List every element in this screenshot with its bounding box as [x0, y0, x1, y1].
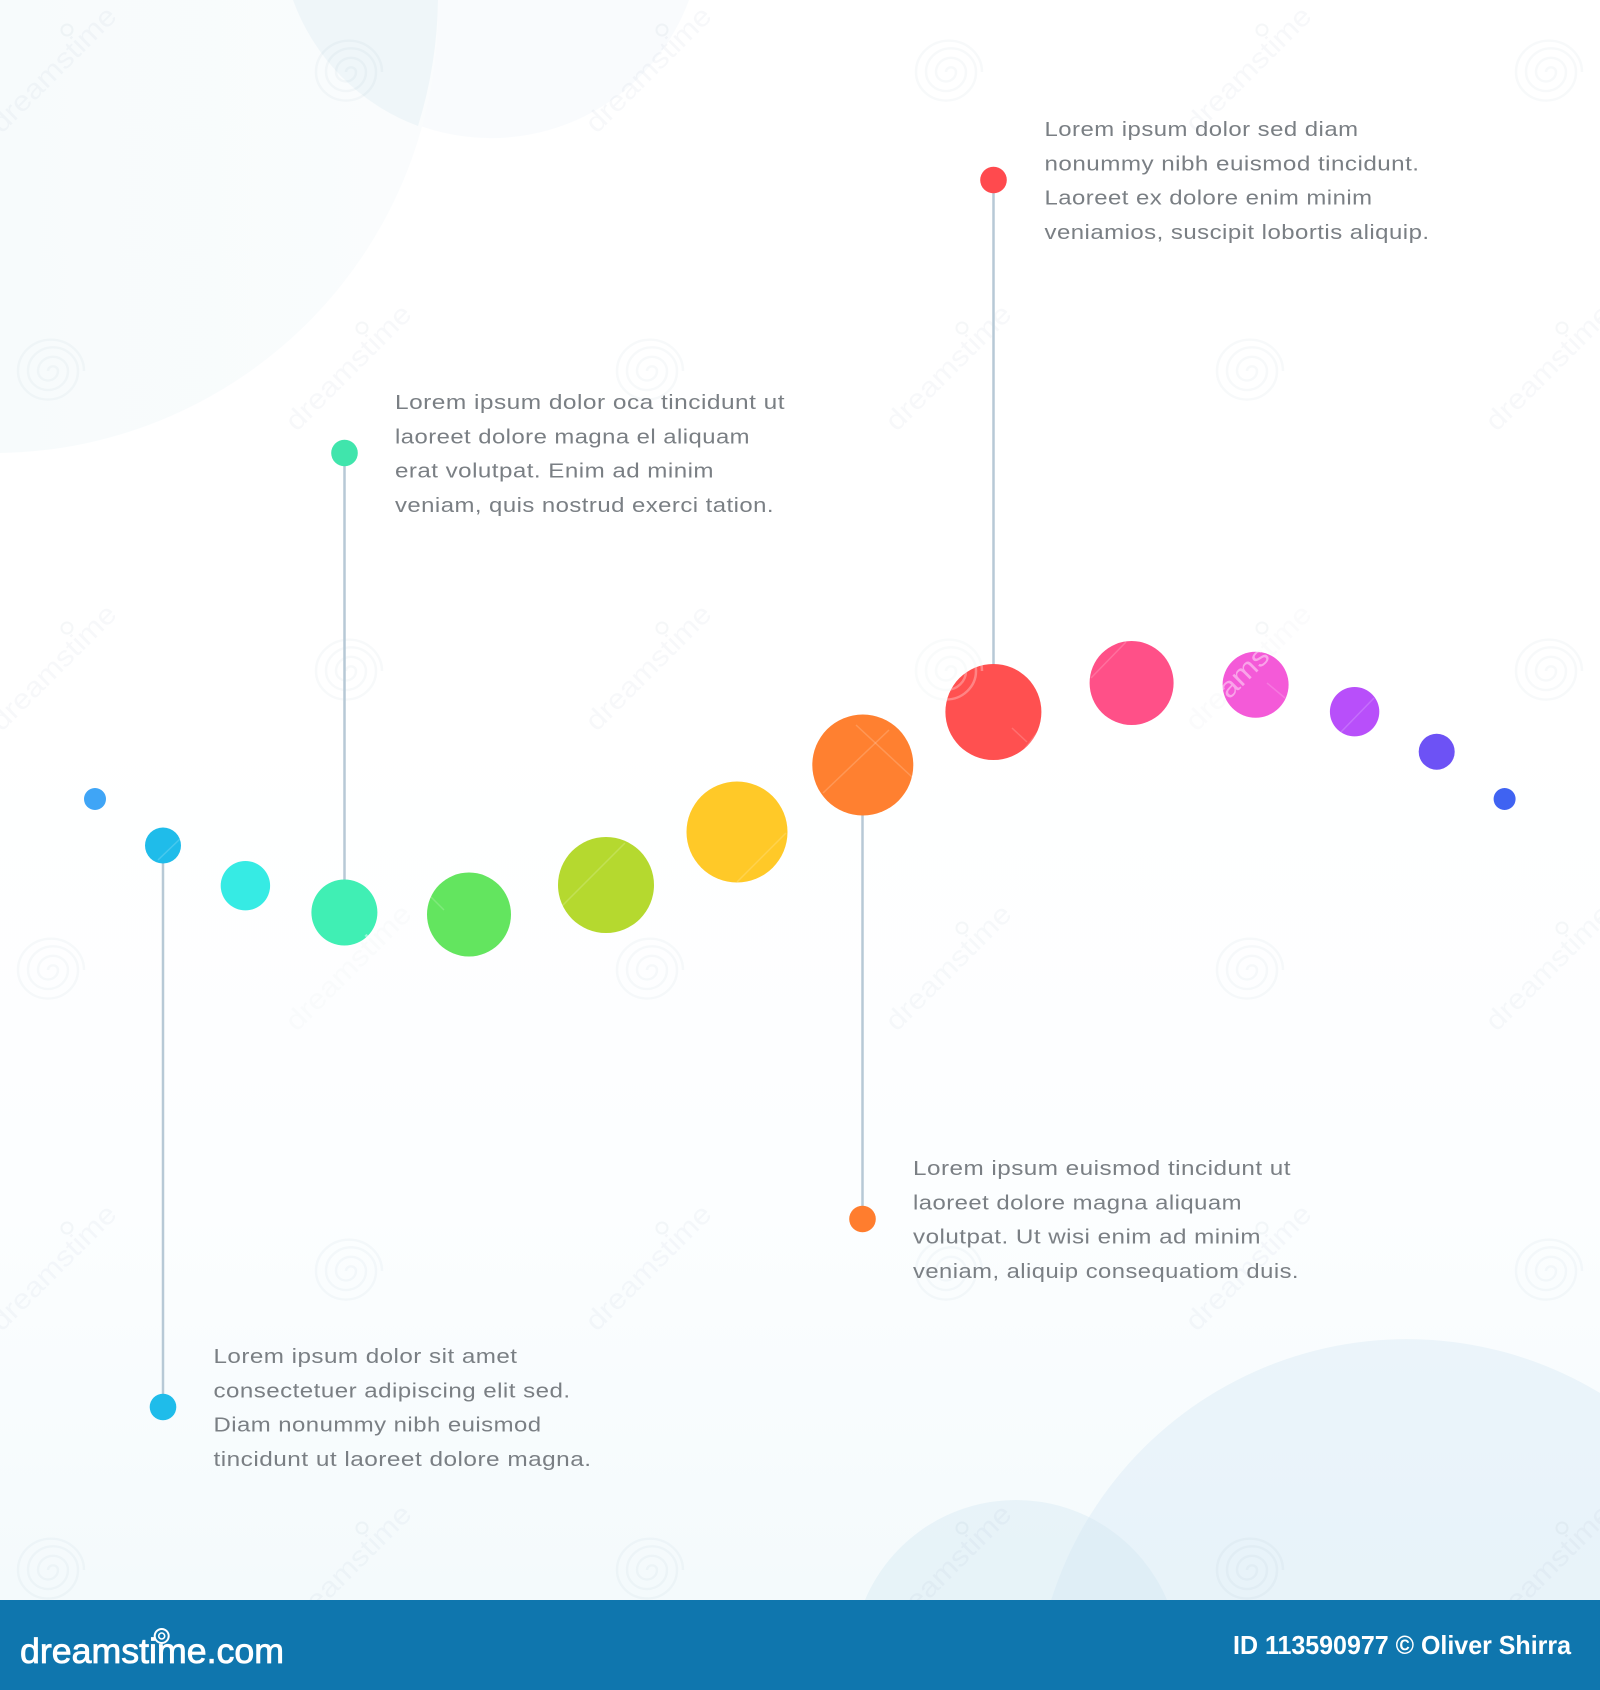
- text block: bottom left: consectetuer adipiscing elit sed.: [214, 1379, 570, 1402]
- watermark overlay on dots: dreamstime: [1179, 598, 1318, 737]
- background circle: top overlap: [293, 0, 438, 126]
- text block: bottom left: tincidunt ut laoreet dolore magna.: [214, 1448, 592, 1471]
- watermark text: dreamstime: [279, 298, 418, 437]
- text block: top right: nonummy nibh euismod tincidunt.: [1044, 152, 1420, 175]
- pin dot: red: [980, 167, 1007, 193]
- watermark text: dreamstime: [579, 598, 718, 737]
- watermark overlay on dots: dreamstime: [279, 898, 418, 1037]
- text block: upper left: veniam, quis nostrud exerci tation.: [395, 494, 774, 517]
- text block: lower centre: veniam, aliquip consequatiom duis.: [913, 1260, 1299, 1283]
- watermark text: dreamstime: [279, 1498, 418, 1637]
- background circle: bottom large: [1051, 1339, 1600, 1600]
- pin dot: orange: [849, 1206, 876, 1232]
- pin dot: blue: [150, 1394, 176, 1420]
- watermark text: dreamstime: [1179, 0, 1318, 139]
- connector lines: [163, 180, 994, 1407]
- watermark text: dreamstime: [879, 298, 1018, 437]
- text block: lower centre: laoreet dolore magna aliquam: [913, 1191, 1242, 1214]
- text block: upper left: erat volutpat. Enim ad minim: [395, 460, 714, 483]
- text block: upper left: [395, 391, 785, 517]
- text block: bottom left: Lorem ipsum dolor sit amet: [214, 1345, 518, 1368]
- watermark text: dreamstime: [279, 898, 418, 1037]
- watermark text: dreamstime: [579, 1198, 718, 1337]
- text block: lower centre: [913, 1157, 1299, 1283]
- text block: upper left: laoreet dolore magna el aliquam: [395, 425, 750, 448]
- text block: top right: Laoreet ex dolore enim minim: [1044, 187, 1372, 210]
- watermark text: dreamstime: [579, 0, 718, 139]
- text block: lower centre: volutpat. Ut wisi enim ad minim: [913, 1226, 1261, 1249]
- text block: top right: [1044, 118, 1430, 244]
- watermark overlay on dots: [158, 598, 1374, 1037]
- watermark text: dreamstime: [879, 1498, 1018, 1637]
- timeline dots: [84, 641, 1516, 956]
- text block: top right: Lorem ipsum dolor sed diam: [1044, 118, 1358, 141]
- text block: top right: veniamios, suscipit lobortis aliquip.: [1044, 221, 1430, 244]
- footer logo: dreamstime.com: [20, 1632, 284, 1671]
- footer bar: [0, 1600, 1600, 1690]
- background circle: top left: [0, 0, 438, 453]
- text block: bottom left: [214, 1345, 592, 1471]
- watermark text: dreamstime: [1179, 1198, 1318, 1337]
- background circle: bottom small: [865, 1500, 1167, 1600]
- pin dot: green: [331, 440, 358, 466]
- text block: upper left: Lorem ipsum dolor oca tincidunt ut: [395, 391, 785, 414]
- watermark text: dreamstime: [1179, 598, 1318, 737]
- footer credit: ID 113590977 © Oliver Shirra: [1233, 1630, 1572, 1660]
- watermark text: dreamstime: [879, 898, 1018, 1037]
- background circle: top centre: [293, 0, 689, 138]
- text block: bottom left: Diam nonummy nibh euismod: [214, 1414, 542, 1437]
- text block: lower centre: Lorem ipsum euismod tincidunt ut: [913, 1157, 1291, 1180]
